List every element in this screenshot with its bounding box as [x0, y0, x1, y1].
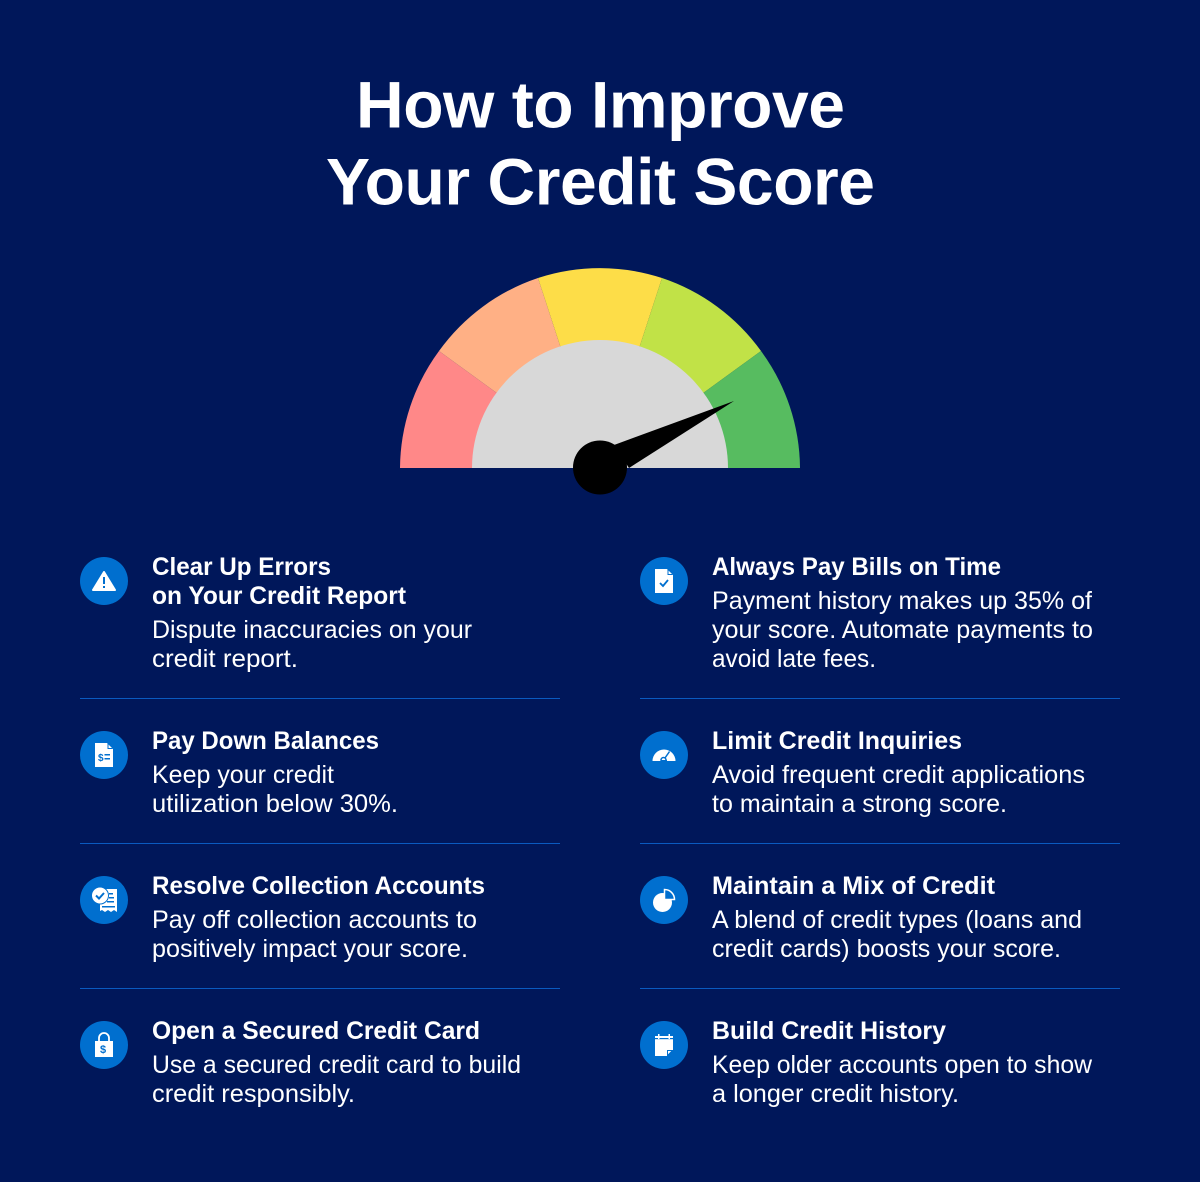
icon: pie chart: [640, 876, 688, 924]
heading: Limit Credit Inquiries: [712, 727, 962, 755]
icon: warning triangle: [80, 557, 128, 605]
icon: speedometer: [640, 731, 688, 779]
text: [712, 906, 1082, 963]
item: open a secured credit card: [80, 1017, 521, 1108]
heading: [152, 553, 407, 610]
text: Keep your credit: [152, 761, 334, 789]
text: credit responsibly.: [152, 1080, 355, 1108]
icon: document with check: [640, 557, 688, 605]
heading: on Your Credit Report: [152, 582, 407, 610]
text: [152, 616, 472, 673]
heading: Maintain a Mix of Credit: [712, 872, 996, 900]
text: [152, 1051, 521, 1108]
gauge needle: [573, 401, 734, 494]
title: Your Credit Score: [326, 144, 875, 218]
text: your score. Automate payments to: [712, 616, 1093, 644]
text: credit cards) boosts your score.: [712, 935, 1061, 963]
text: utilization below 30%.: [152, 790, 398, 818]
text: Dispute inaccuracies on your: [152, 616, 472, 644]
item: maintain a mix of credit: [640, 872, 1082, 963]
icon: receipt with check: [80, 876, 128, 924]
icon: padlock with dollar: [80, 1021, 128, 1069]
text: [712, 587, 1093, 673]
text: avoid late fees.: [712, 645, 876, 673]
icon: document with dollar: [80, 731, 128, 779]
text: Use a secured credit card to build: [152, 1051, 521, 1079]
text: credit report.: [152, 645, 298, 673]
icon: padlock with dollar: $: [100, 1044, 106, 1056]
heading: Always Pay Bills on Time: [712, 553, 1001, 581]
text: [152, 761, 398, 818]
heading: Clear Up Errors: [152, 553, 331, 581]
item: pay down balances: [80, 727, 398, 818]
heading: Pay Down Balances: [152, 727, 379, 755]
heading: Open a Secured Credit Card: [152, 1017, 480, 1045]
item: clear up errors: [80, 553, 472, 673]
text: A blend of credit types (loans and: [712, 906, 1082, 934]
title: How to Improve: [356, 68, 845, 142]
text: [712, 1051, 1093, 1108]
icon: calendar: [640, 1021, 688, 1069]
text: Avoid frequent credit applications: [712, 761, 1085, 789]
text: [152, 906, 477, 963]
text: Keep older accounts open to show: [712, 1051, 1093, 1079]
item: always pay bills on time: [640, 553, 1093, 673]
heading: Resolve Collection Accounts: [152, 872, 485, 900]
title: [326, 68, 875, 218]
icon: document with dollar: $: [98, 753, 104, 764]
heading: Build Credit History: [712, 1017, 946, 1045]
item: resolve collection accounts: [80, 872, 485, 963]
text: Payment history makes up 35% of: [712, 587, 1092, 615]
text: [712, 761, 1085, 818]
text: to maintain a strong score.: [712, 790, 1007, 818]
gauge chart: [400, 268, 800, 494]
text: Pay off collection accounts to: [152, 906, 477, 934]
text: positively impact your score.: [152, 935, 468, 963]
item: build credit history: [640, 1017, 1093, 1108]
item: limit credit inquiries: [640, 727, 1085, 818]
text: a longer credit history.: [712, 1080, 959, 1108]
